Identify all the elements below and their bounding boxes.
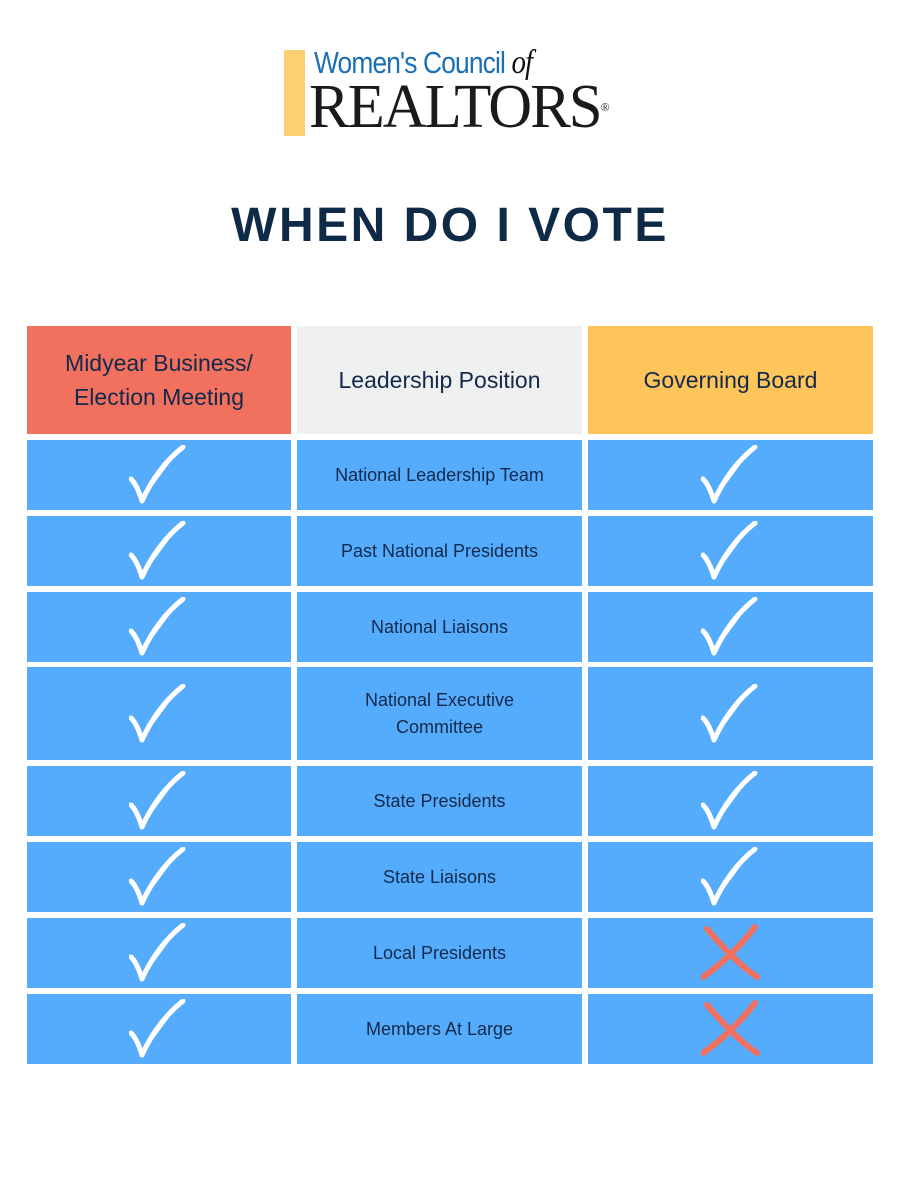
logo text bottom: REALTORS®	[309, 73, 608, 141]
row 5	[27, 766, 873, 836]
row 4: National Executive	[365, 690, 514, 710]
row 2: Past National Presidents	[341, 540, 538, 560]
header: leadership	[297, 326, 582, 434]
logo	[284, 44, 610, 141]
logo text top: Women's Council of	[314, 44, 532, 81]
row 8: Members At Large	[366, 1018, 513, 1038]
header: leadership: Leadership Position	[338, 367, 541, 393]
row 4: Committee	[396, 716, 483, 736]
header: midyear	[27, 326, 291, 434]
row 3	[27, 592, 873, 662]
title: WHEN DO I VOTE	[231, 198, 669, 252]
row 7: Local Presidents	[373, 942, 506, 962]
row 3: National Liaisons	[371, 616, 508, 636]
row 8	[27, 994, 873, 1064]
header: midyear: Midyear Business/	[65, 350, 253, 376]
header: midyear: Election Meeting	[74, 384, 244, 410]
row 5: State Presidents	[373, 790, 506, 810]
row 1: National Leadership Team	[335, 464, 544, 484]
table	[27, 326, 873, 434]
row 1	[27, 440, 873, 510]
row 7	[27, 918, 873, 988]
row 6: State Liaisons	[383, 866, 496, 886]
row 2	[27, 516, 873, 586]
header: governing: Governing Board	[644, 367, 817, 393]
logo bar	[284, 50, 305, 136]
row 4	[27, 667, 873, 760]
header: governing	[588, 326, 873, 434]
row 6	[27, 842, 873, 912]
